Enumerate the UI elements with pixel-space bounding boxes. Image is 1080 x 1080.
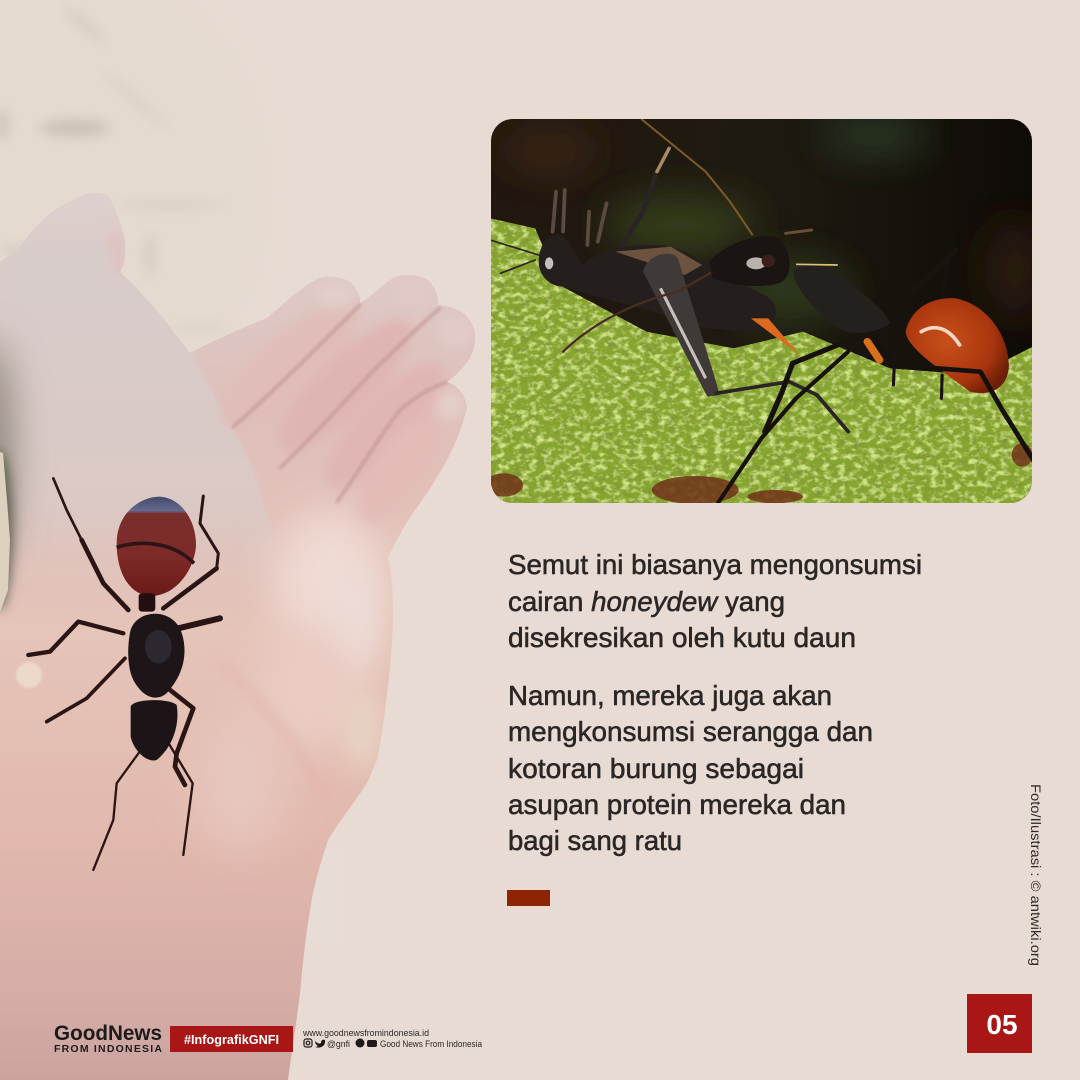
cricket hind leg — [643, 254, 720, 397]
ant abdomen — [117, 497, 196, 596]
ant red abdomen — [906, 298, 1009, 393]
palm highlights — [275, 510, 385, 650]
cricket prey — [490, 148, 848, 432]
ant petiole — [139, 593, 155, 612]
finger creases — [233, 305, 447, 502]
back of hand — [3, 324, 266, 525]
ant far legs — [786, 230, 956, 398]
palm crease — [272, 716, 278, 723]
paragraph 2: kotoran burung sebagai — [508, 753, 804, 784]
paragraph 2: asupan protein mereka dan — [508, 789, 846, 820]
faint retouch patch — [306, 850, 342, 945]
paragraph 1: disekresikan oleh kutu daun — [508, 622, 856, 653]
accent bar — [507, 890, 550, 906]
ant head — [131, 700, 177, 760]
fingers — [225, 312, 462, 518]
faded paper texture — [0, 0, 260, 410]
paragraph 2: bagi sang ratu — [508, 825, 682, 856]
ant thorax — [128, 614, 185, 698]
ant head — [709, 236, 790, 286]
photo credit: Foto/Ilustrasi : © antwiki.org — [1028, 784, 1043, 966]
footer logo — [54, 1022, 162, 1055]
paragraph 1: cairan honeydew yang — [508, 586, 785, 617]
social handle: @gnfi — [327, 1039, 350, 1050]
thumb side shadow — [112, 232, 120, 274]
ant thorax — [793, 265, 890, 333]
body text — [508, 549, 922, 856]
ant near legs — [718, 342, 1034, 503]
page number: 05 — [986, 1009, 1018, 1040]
photo: ant attacking cricket — [485, 115, 1045, 505]
wrist edge scrap of paper — [0, 452, 10, 612]
paragraph 2: Namun, mereka juga akan — [508, 680, 832, 711]
hand — [0, 190, 480, 1080]
page name: Good News From Indonesia — [380, 1039, 483, 1050]
paragraph 2 — [508, 680, 873, 856]
icon: twitter — [315, 1040, 325, 1048]
footer logo: GoodNews — [54, 1022, 162, 1045]
page number — [967, 994, 1032, 1053]
hand photo with ant — [0, 190, 480, 1080]
hashtag tag — [170, 1026, 293, 1052]
footer website and social: www.goodnewsfromindonesia.id — [302, 1028, 429, 1039]
cricket body — [539, 234, 776, 332]
ant antenna — [641, 119, 753, 235]
photo background — [491, 119, 1032, 503]
paragraph 2: mengkonsumsi serangga dan — [508, 716, 873, 747]
paragraph 1: Semut ini biasanya mengonsumsi — [508, 549, 922, 580]
bark patches — [485, 443, 1033, 504]
icon: instagram — [304, 1039, 312, 1047]
ant legs and antennae — [28, 478, 220, 870]
footer website and social — [302, 1028, 483, 1050]
paragraph 1 — [508, 549, 922, 653]
icon: youtube — [367, 1040, 377, 1047]
icon: ant on hand — [28, 478, 220, 870]
blurred foliage — [500, 115, 1045, 320]
icon: facebook — [356, 1038, 364, 1048]
red-abdomen ant — [641, 119, 1034, 503]
water droplet on hand — [16, 662, 42, 688]
footer logo: FROM INDONESIA — [54, 1043, 162, 1055]
hashtag tag: #InfografikGNFI — [184, 1033, 279, 1047]
moss ground — [490, 218, 1036, 505]
